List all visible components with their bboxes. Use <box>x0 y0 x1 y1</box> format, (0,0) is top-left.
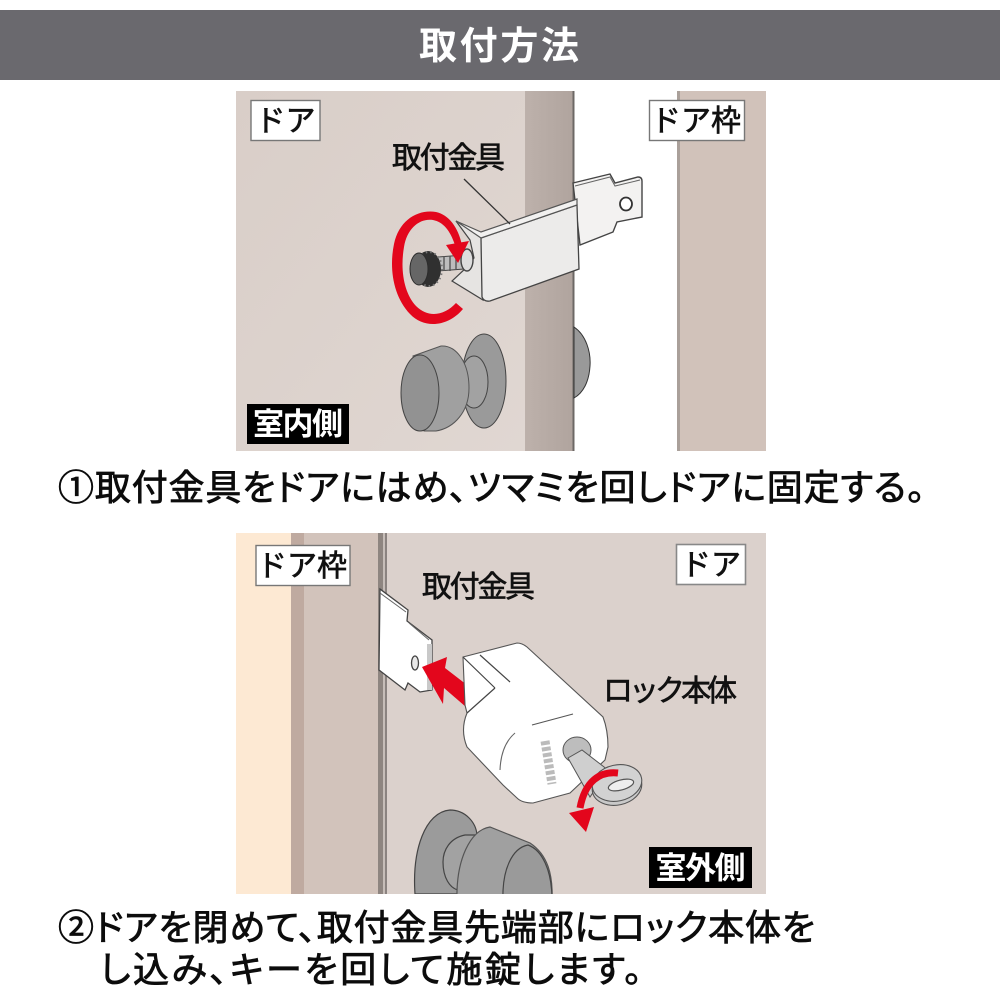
door surface <box>387 533 766 894</box>
label: mounting bracket: 取付金具 <box>422 571 535 604</box>
thumb screw <box>410 249 473 287</box>
lock body <box>463 643 608 803</box>
caption: step 2 <box>58 907 815 990</box>
caption: step 2: ②ドアを閉めて、取付金具先端部にロック本体を <box>58 907 815 948</box>
label: lock body: ロック本体 <box>603 675 737 708</box>
door knob <box>415 810 552 900</box>
leader line <box>464 179 510 224</box>
door frame opening <box>572 91 766 451</box>
key <box>563 737 645 810</box>
door edge <box>525 91 573 451</box>
panel: step 2 illustration <box>236 533 766 900</box>
header banner: 取付方法 <box>419 26 579 68</box>
bracket side flange <box>452 221 483 300</box>
label: door frame: ドア枠 <box>651 105 741 138</box>
label: indoor side: 室内側 <box>253 407 343 442</box>
label: door frame: ドア枠 <box>257 550 347 583</box>
door frame <box>291 533 387 894</box>
header banner <box>0 10 1000 80</box>
caption: step 1: ①取付金具をドアにはめ、ツマミを回しドアに固定する。 <box>58 467 925 508</box>
label: door: ドア <box>681 549 741 582</box>
label: mounting bracket: 取付金具 <box>392 142 505 175</box>
door surface <box>236 91 525 451</box>
red key-turn arrow <box>569 773 618 832</box>
far side knob <box>574 327 590 398</box>
bracket tip <box>573 174 642 245</box>
bracket front plate <box>456 199 579 301</box>
bracket tip <box>379 589 432 692</box>
panel: step 1 illustration <box>236 91 766 451</box>
door knob <box>401 334 506 431</box>
red insertion arrow <box>422 657 467 707</box>
wall <box>236 533 291 894</box>
label: door: ドア <box>256 105 316 138</box>
caption: step 2: し込み、キーを回して施錠します。 <box>100 949 642 990</box>
red rotation arrow <box>392 212 469 324</box>
label: outdoor side: 室外側 <box>656 851 746 886</box>
